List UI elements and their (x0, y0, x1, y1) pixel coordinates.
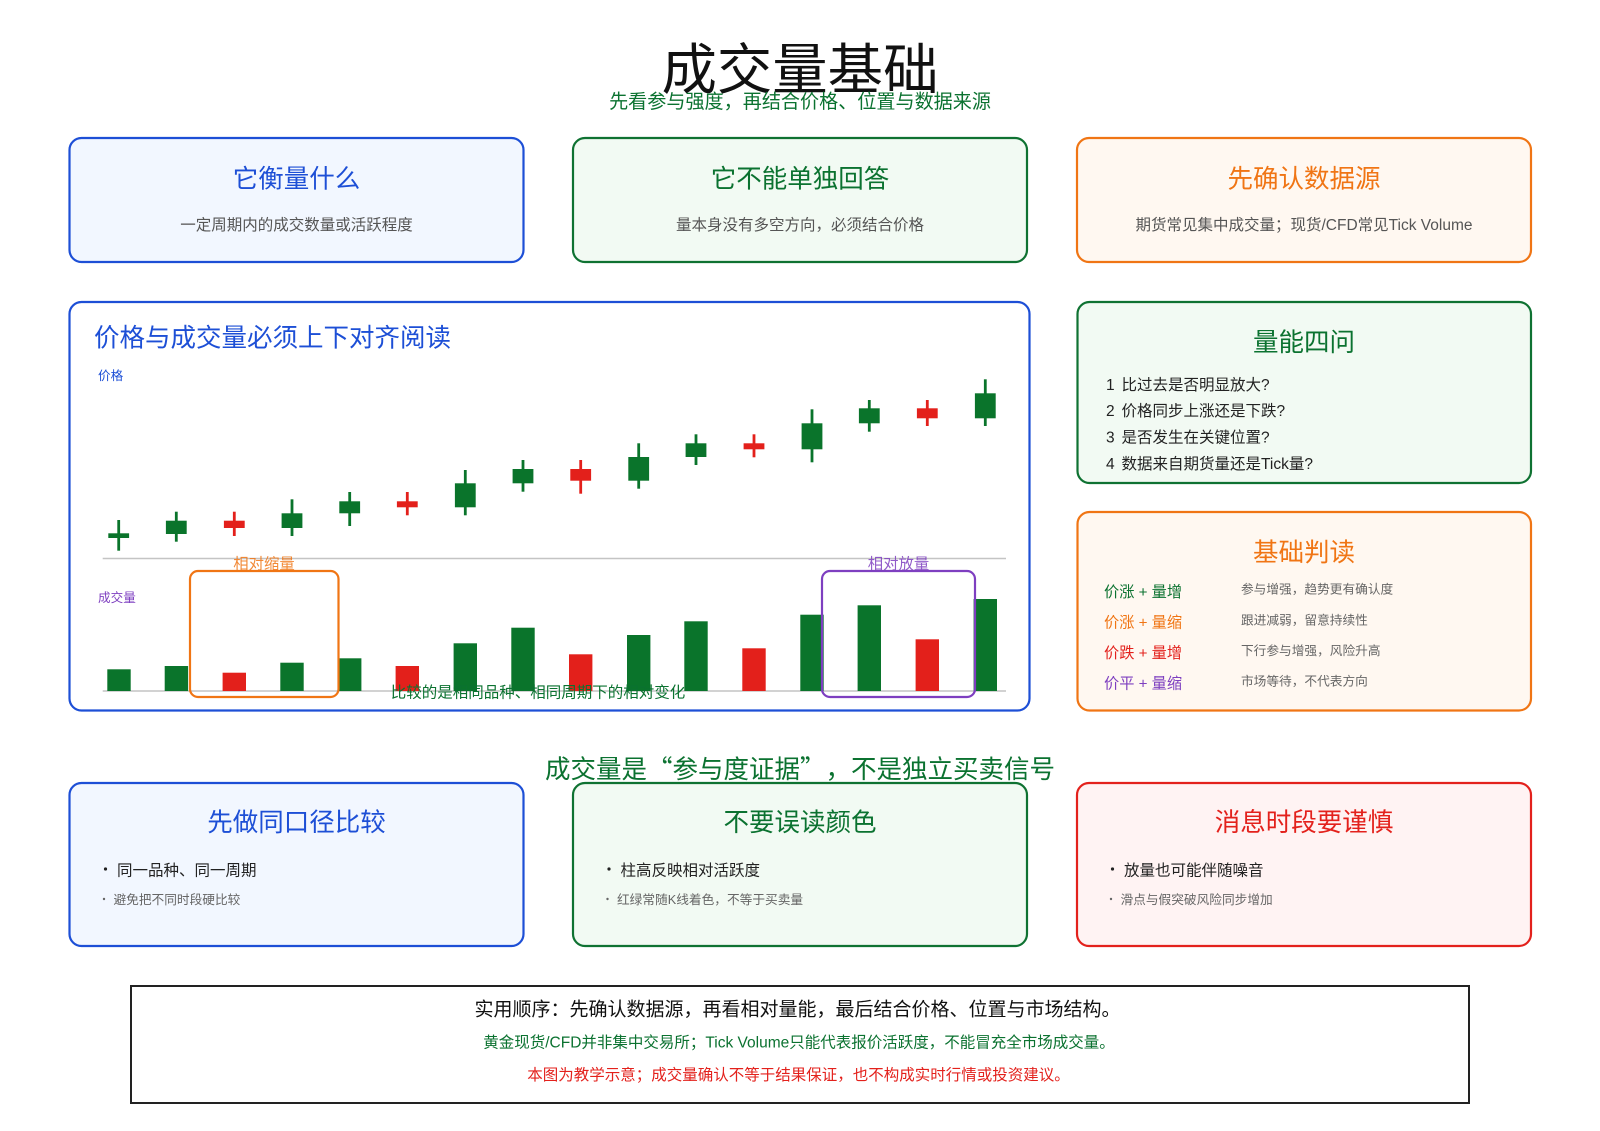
heading: 它不能单独回答 (711, 166, 889, 194)
callout: 相对放量 (868, 555, 929, 573)
panel: same-basis comparison (70, 783, 524, 946)
key message headline: 成交量是“参与度证据”，不是独立买卖信号 (545, 749, 1055, 786)
heading: 消息时段要谨慎 (1215, 809, 1393, 837)
row: price up, volume up (1104, 582, 1394, 601)
row: price flat, volume down: 价平 + 量缩 (1104, 676, 1182, 692)
panel: basic reading (1078, 512, 1531, 710)
panel: price and volume chart (70, 302, 1030, 710)
question list: 数据来自期货量还是Tick量? (1122, 455, 1313, 473)
axis label: volume: 成交量 (98, 590, 136, 605)
row: price up, volume down (1104, 612, 1368, 632)
heading: 价格与成交量必须上下对齐阅读 (94, 324, 451, 352)
candlestick chart (108, 379, 996, 551)
row: price down, volume up (1104, 643, 1381, 662)
sub bullet: 滑点与假突破风险同步增加 (1120, 892, 1273, 907)
highlight: relative expansion (822, 555, 975, 697)
heading: 基础判读 (1253, 539, 1355, 567)
row: price up, volume down: 价涨 + 量缩 (1104, 614, 1182, 632)
row: price flat, volume down: 市场等待，不代表方向 (1241, 673, 1368, 688)
panel: confirm data source (1077, 138, 1531, 262)
row: price flat, volume down (1104, 673, 1368, 692)
text block: 一定周期内的成交数量或活跃程度 (180, 216, 413, 234)
text block: 期货常见集中成交量；现货/CFD常见Tick Volume (1135, 216, 1473, 234)
panel: what it measures (70, 138, 524, 262)
row: price down, volume up: 下行参与增强，风险升高 (1241, 643, 1381, 658)
row: price up, volume down: 跟进减弱，留意持续性 (1241, 612, 1368, 627)
row: price down, volume up: 价跌 + 量增 (1104, 645, 1182, 662)
question list: 4 (1106, 456, 1115, 473)
heading: 先做同口径比较 (207, 809, 386, 837)
sub bullet: 红绿常随K线着色，不等于买卖量 (617, 892, 803, 907)
text block: 量本身没有多空方向，必须结合价格 (676, 216, 924, 234)
bullet: 同一品种、同一周期 (117, 862, 257, 880)
disclaimer: 本图为教学示意；成交量确认不等于结果保证，也不构成实时行情或投资建议。 (527, 1065, 1070, 1084)
title: 成交量基础 (662, 39, 938, 101)
heading: 它衡量什么 (233, 166, 360, 194)
practical order: 实用顺序：先确认数据源，再看相对量能，最后结合价格、位置与市场结构。 (474, 998, 1121, 1020)
chart caption: 比较的是相同品种、相同周期下的相对变化 (391, 684, 685, 702)
question list: 3 (1106, 430, 1115, 446)
footer notes box (131, 986, 1469, 1103)
question list: 1 (1106, 377, 1115, 394)
volume bar chart (107, 599, 997, 691)
callout: 相对缩量 (233, 555, 295, 573)
question list: 比过去是否明显放大? (1122, 376, 1270, 394)
question list: 价格同步上涨还是下跌? (1122, 402, 1286, 420)
sub bullet: 避免把不同时段硬比较 (114, 893, 241, 907)
bullet: 柱高反映相对活跃度 (620, 862, 760, 880)
data source note: 黄金现货/CFD并非集中交易所；Tick Volume只能代表报价活跃度，不能冒充全市场成交量。 (483, 1034, 1115, 1052)
panel: news caution (1077, 783, 1531, 946)
question list: 2 (1106, 403, 1115, 420)
heading: 不要误读颜色 (723, 809, 877, 837)
subtitle: 先看参与强度，再结合价格、位置与数据来源 (609, 91, 991, 113)
bullet: 放量也可能伴随噪音 (1124, 862, 1264, 880)
heading: 先确认数据源 (1227, 166, 1381, 194)
row: price up, volume up: 价涨 + 量增 (1104, 584, 1182, 601)
panel: what it cannot answer (573, 138, 1027, 262)
row: price up, volume up: 参与增强，趋势更有确认度 (1241, 582, 1394, 596)
question list: 是否发生在关键位置? (1122, 428, 1270, 446)
heading: 量能四问 (1253, 329, 1355, 357)
axis label: price: 价格 (98, 368, 124, 383)
highlight: relative contraction (190, 555, 338, 697)
panel: do not misread color (573, 783, 1027, 946)
panel: four questions (1078, 302, 1531, 483)
question list (1106, 376, 1313, 473)
divider and baseline (103, 558, 1006, 691)
